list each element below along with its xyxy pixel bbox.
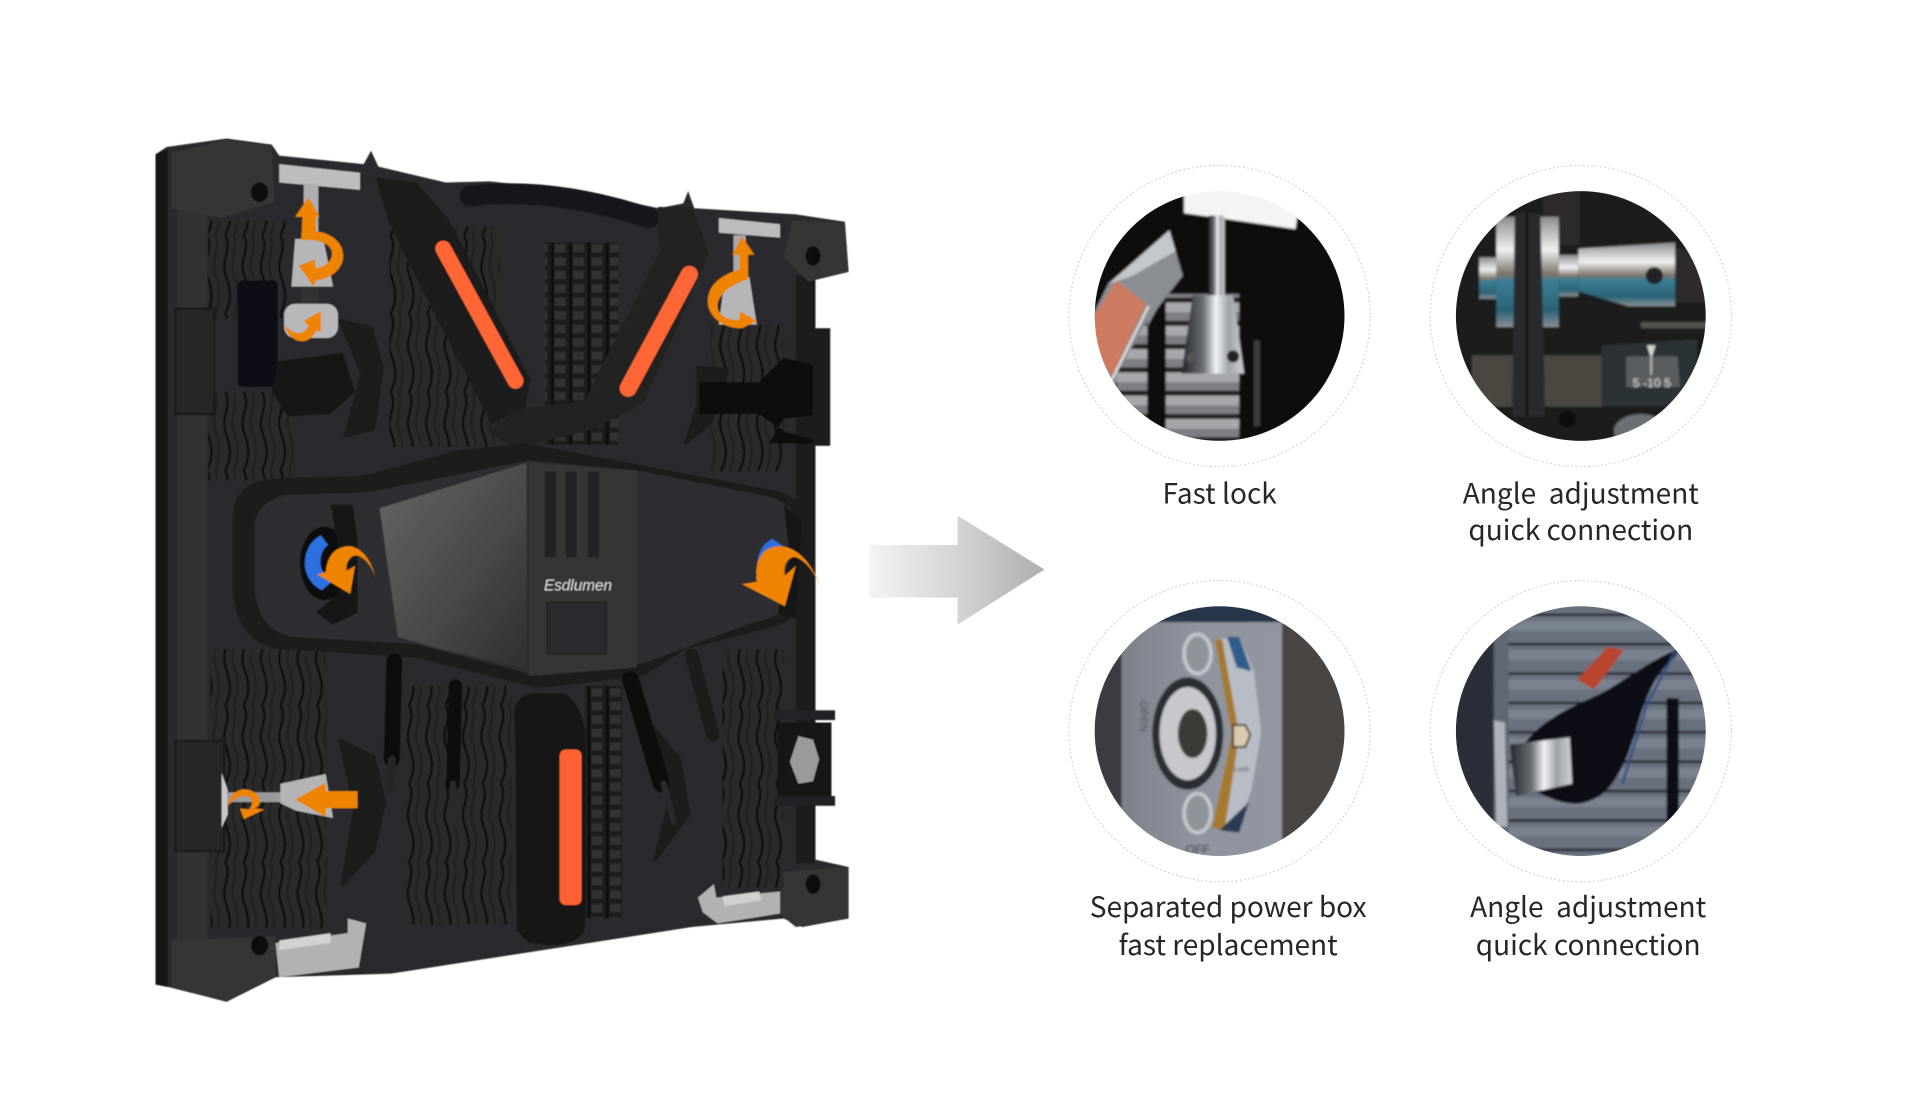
arrow: top left cylinder: [284, 311, 321, 341]
power box shell: [233, 443, 811, 688]
photo circle: Lock: [1234, 765, 1250, 774]
label: [1090, 885, 1367, 964]
latch: right: [699, 358, 827, 443]
handle: left arm: [377, 179, 529, 423]
label: Angle adjustment: [1463, 471, 1699, 512]
photo circle: OFF: [1185, 843, 1210, 857]
power box inner panel: [255, 460, 801, 676]
blue lock left: [300, 505, 358, 625]
cables: [389, 655, 713, 823]
label: Fast lock: [1162, 471, 1277, 512]
dotted ring: [1430, 580, 1731, 882]
arrow: grey pointer to details: [869, 516, 1044, 625]
latch post right: [813, 328, 830, 446]
panel: LED cabinet rear view: [156, 138, 849, 1002]
arrow: left blue lock: [317, 546, 376, 594]
side clips: [340, 321, 727, 884]
photo circle: [1456, 606, 1706, 856]
detail: angle adjustment top: [1430, 165, 1731, 549]
arrow: bottom left push: [295, 783, 358, 817]
label: fast replacement: [1119, 923, 1338, 964]
side tabs: [175, 309, 224, 851]
photo circle: [1094, 191, 1344, 441]
label: [1463, 471, 1699, 549]
arrow: right blue lock: [742, 546, 820, 606]
left edge: [156, 149, 168, 987]
arrow: top left up: [295, 197, 343, 287]
logo: Esdlumen: [544, 577, 612, 594]
arrow: top right up: [708, 236, 757, 328]
grey lock: top right: [719, 218, 780, 325]
mounting holes: [251, 183, 820, 955]
label: [1470, 885, 1707, 964]
bracket: lower left knob: [272, 353, 355, 416]
photo circle: OPEN: [1137, 701, 1149, 732]
detail: fast lock: [1069, 165, 1370, 512]
latch plate: [547, 603, 606, 654]
bracket: right hex mount: [774, 710, 835, 806]
arrow: bottom left twist: [228, 789, 264, 819]
right inner frame: [796, 276, 814, 863]
dotted ring: [1069, 165, 1370, 467]
cabinet body: [156, 138, 849, 1002]
latch: bottom right: [698, 884, 780, 923]
power box lit face: [380, 463, 527, 669]
fins: [529, 463, 637, 676]
label: quick connection: [1468, 508, 1693, 549]
label: Angle adjustment: [1470, 885, 1707, 926]
tread texture areas: [208, 220, 784, 928]
dotted ring: [1069, 580, 1370, 882]
blue lock right: [757, 505, 802, 618]
left frame rail: [178, 208, 207, 943]
orange arrows: [228, 197, 820, 819]
photo circle: [1456, 191, 1706, 441]
latch: bottom left: [276, 918, 366, 977]
photo circle: 5 -10 5: [1633, 376, 1671, 390]
power box: [233, 443, 811, 688]
detail: angle adjustment bottom: [1430, 580, 1731, 964]
handle: top grip: [470, 194, 649, 218]
detail: separated power box: [1069, 580, 1370, 964]
grey lock: bottom left connector: [222, 773, 333, 828]
handle: right orange strip: [628, 274, 689, 388]
photo circle: [1094, 606, 1344, 856]
label: quick connection: [1476, 923, 1701, 964]
handle: bottom orange strip: [560, 749, 582, 905]
handle: left orange strip: [443, 249, 516, 381]
bracket: top left: [238, 280, 278, 387]
corner blocks: [171, 140, 849, 1002]
label: Separated power box: [1090, 885, 1367, 926]
dotted ring: [1430, 165, 1731, 467]
grey lock: top left: [279, 164, 360, 338]
handle: right arm: [490, 208, 708, 447]
handle: bottom: [514, 693, 585, 945]
